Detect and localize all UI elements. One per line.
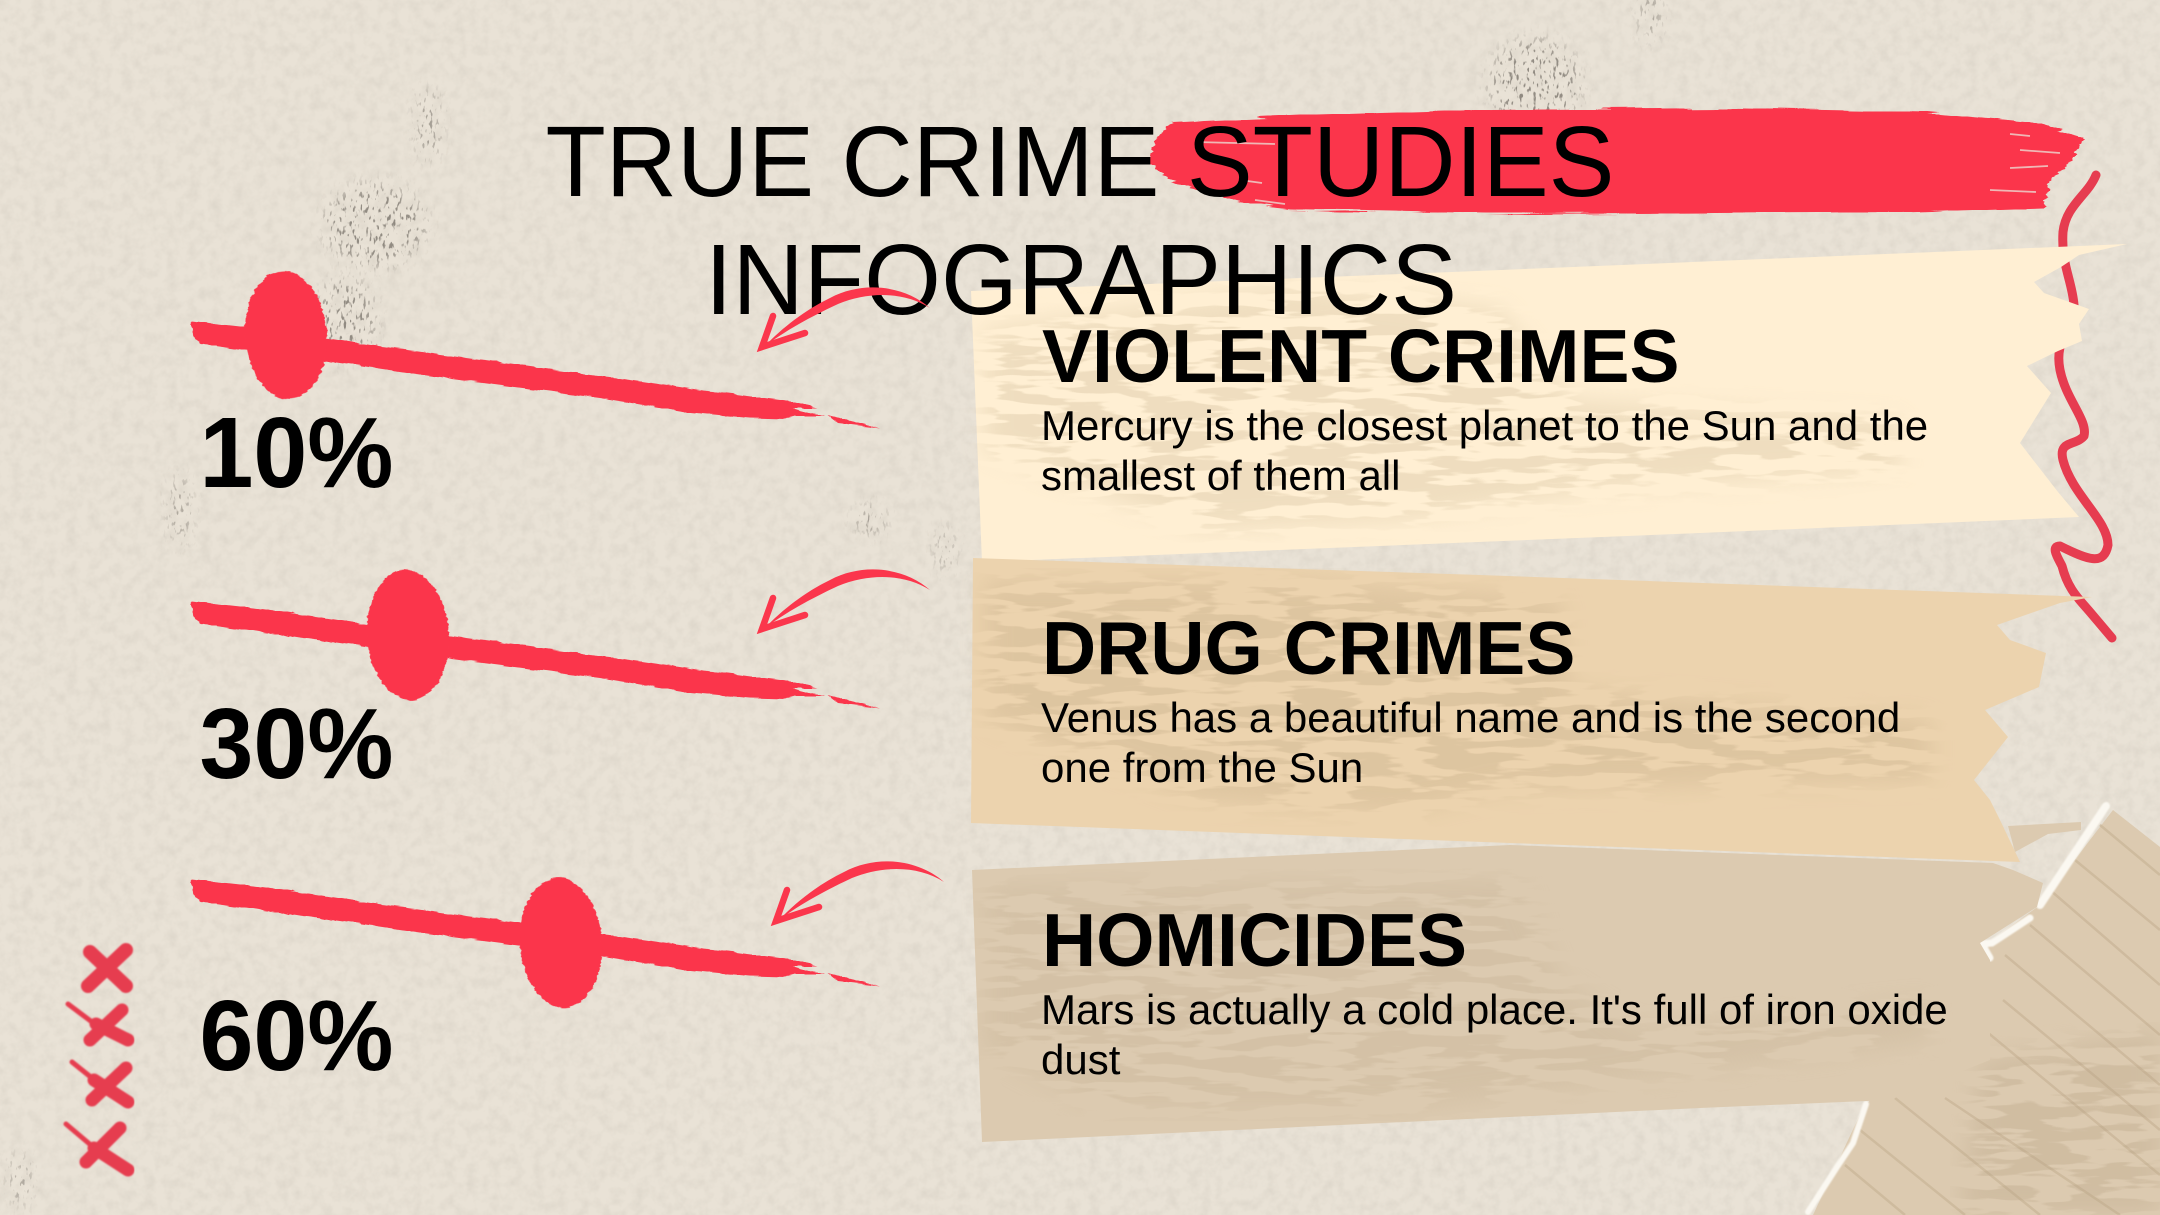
marker 2 (363, 567, 453, 703)
title: INFOGRAPHICS (705, 224, 1457, 336)
panel: violent crimes paper (971, 244, 2127, 562)
text: violent crimes: Mercury is the closest planet to the Sun and the (1041, 402, 1928, 449)
title: TRUE CRIME STUDIES (546, 106, 1614, 218)
panel: homicides paper (972, 845, 2043, 1142)
slider 30% (191, 567, 880, 708)
percent labels: 60% (200, 980, 394, 1092)
percent labels (200, 397, 394, 1092)
text: violent crimes (1041, 314, 1928, 499)
slider 60% (191, 875, 880, 1011)
torn paper corner (1808, 806, 2160, 1215)
percent labels: 30% (200, 688, 394, 800)
title (546, 106, 1614, 336)
panel: drug crimes paper (971, 558, 2092, 862)
squiggle (2055, 175, 2112, 638)
bar 3 (191, 879, 880, 986)
text: violent crimes: VIOLENT CRIMES (1042, 314, 1680, 398)
percent labels: 10% (200, 397, 394, 509)
marker 3 (516, 875, 606, 1011)
text: drug crimes (1041, 606, 1900, 791)
text: drug crimes: DRUG CRIMES (1042, 606, 1575, 690)
tan scrap (2008, 822, 2081, 852)
text: violent crimes: smallest of them all (1041, 452, 1400, 499)
icon: x marks (66, 950, 128, 1170)
text: drug crimes: one from the Sun (1041, 744, 1363, 791)
marker 1 (241, 268, 331, 402)
text: homicides: Mars is actually a cold place. It's full of iron oxide (1041, 986, 1948, 1033)
arrow 3 (776, 861, 944, 921)
arrow 2 (762, 569, 930, 629)
red brush stroke behind title (1148, 108, 2084, 214)
bar 1 (191, 321, 880, 428)
bar 2 (191, 601, 880, 708)
text: homicides (1041, 898, 1948, 1083)
text: homicides: dust (1041, 1036, 1121, 1083)
text: drug crimes: Venus has a beautiful name and is the second (1041, 694, 1900, 741)
text: homicides: HOMICIDES (1042, 898, 1467, 982)
slider 10% (191, 268, 880, 428)
arrow 1 (762, 287, 930, 347)
